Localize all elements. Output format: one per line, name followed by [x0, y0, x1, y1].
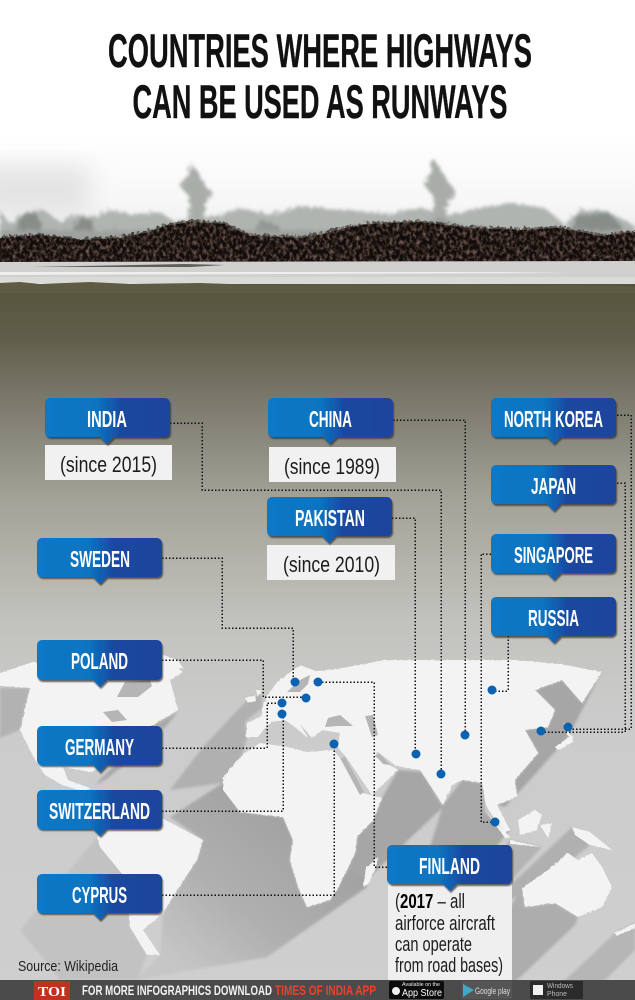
panel: Russia: RUSSIA [528, 605, 579, 631]
Google Play badge: Google play [475, 986, 510, 996]
panel: Finland: from road bases) [395, 955, 503, 977]
Google Play badge [462, 981, 512, 999]
panel: Switzerland: SWITZERLAND [49, 798, 150, 824]
Japan [555, 722, 573, 750]
location dots [278, 678, 572, 826]
TOI logo: TOI [38, 985, 66, 1000]
panel: Poland [37, 640, 162, 687]
panel: North Korea [491, 398, 616, 444]
panel: Pakistan: PAKISTAN [295, 505, 365, 531]
tree line [0, 158, 635, 245]
panel: Singapore [491, 534, 616, 580]
panel: Russia [491, 597, 616, 643]
panel: Cyprus: CYPRUS [72, 882, 127, 908]
download prompt: FOR MORE INFOGRAPHICS DOWNLOAD [82, 982, 272, 998]
panel: China: CHINA [309, 406, 352, 432]
panel: Switzerland [37, 790, 162, 836]
continents [0, 655, 635, 955]
runway [0, 261, 635, 286]
panel: Cyprus [37, 874, 162, 920]
panel: Finland [387, 845, 512, 980]
map shadows [0, 672, 635, 985]
panel: India [45, 398, 172, 480]
inland seas [103, 675, 390, 795]
Eurasia [246, 660, 602, 832]
panel: Pakistan: (since 2010) [283, 552, 380, 577]
photo: crowd beside a highway runway [0, 130, 635, 286]
ground and sky gradient panel [0, 284, 635, 1000]
connector lines [162, 415, 631, 895]
TOI logo [34, 981, 70, 1000]
world map [0, 655, 635, 985]
Africa [223, 743, 382, 907]
Australia [522, 853, 612, 917]
panel: China [268, 398, 396, 482]
panel: Finland: (2017 – all [395, 891, 465, 913]
South America [97, 817, 203, 955]
panel: India: (since 2015) [60, 452, 157, 477]
Windows Phone badge: Windows [547, 983, 573, 990]
Windows Phone badge: Phone [547, 991, 567, 998]
panel: Finland: can operate [395, 934, 472, 956]
panel: Pakistan [267, 497, 395, 580]
App Store badge: Available on the [402, 982, 440, 988]
panel: Finland: FINLAND [419, 853, 480, 879]
Britain [245, 690, 262, 703]
panel: Japan: JAPAN [531, 473, 576, 499]
App Store badge: App Store [402, 988, 442, 999]
panel: China: (since 1989) [284, 454, 380, 479]
panel: Japan [491, 465, 616, 511]
Greenland edge [163, 655, 183, 672]
panel: Finland: airforce aircraft [395, 913, 495, 935]
New Zealand [615, 923, 635, 936]
panel: Sweden: SWEDEN [70, 546, 130, 572]
panel: India: INDIA [87, 406, 127, 432]
app name: TIMES OF INDIA APP [275, 982, 376, 998]
panel: Sweden [37, 538, 162, 584]
source: Source: Wikipedia [18, 958, 119, 975]
Windows Phone badge [530, 981, 583, 999]
title [108, 24, 532, 128]
panel: Poland: POLAND [71, 648, 128, 674]
App Store badge [389, 981, 444, 999]
North America [0, 657, 183, 792]
crowd [0, 220, 635, 262]
footer bar [0, 980, 635, 1000]
Madagascar [363, 857, 378, 887]
panel: Germany: GERMANY [65, 734, 134, 760]
Indonesia and New Guinea [487, 810, 612, 850]
panel: Germany [37, 726, 162, 772]
